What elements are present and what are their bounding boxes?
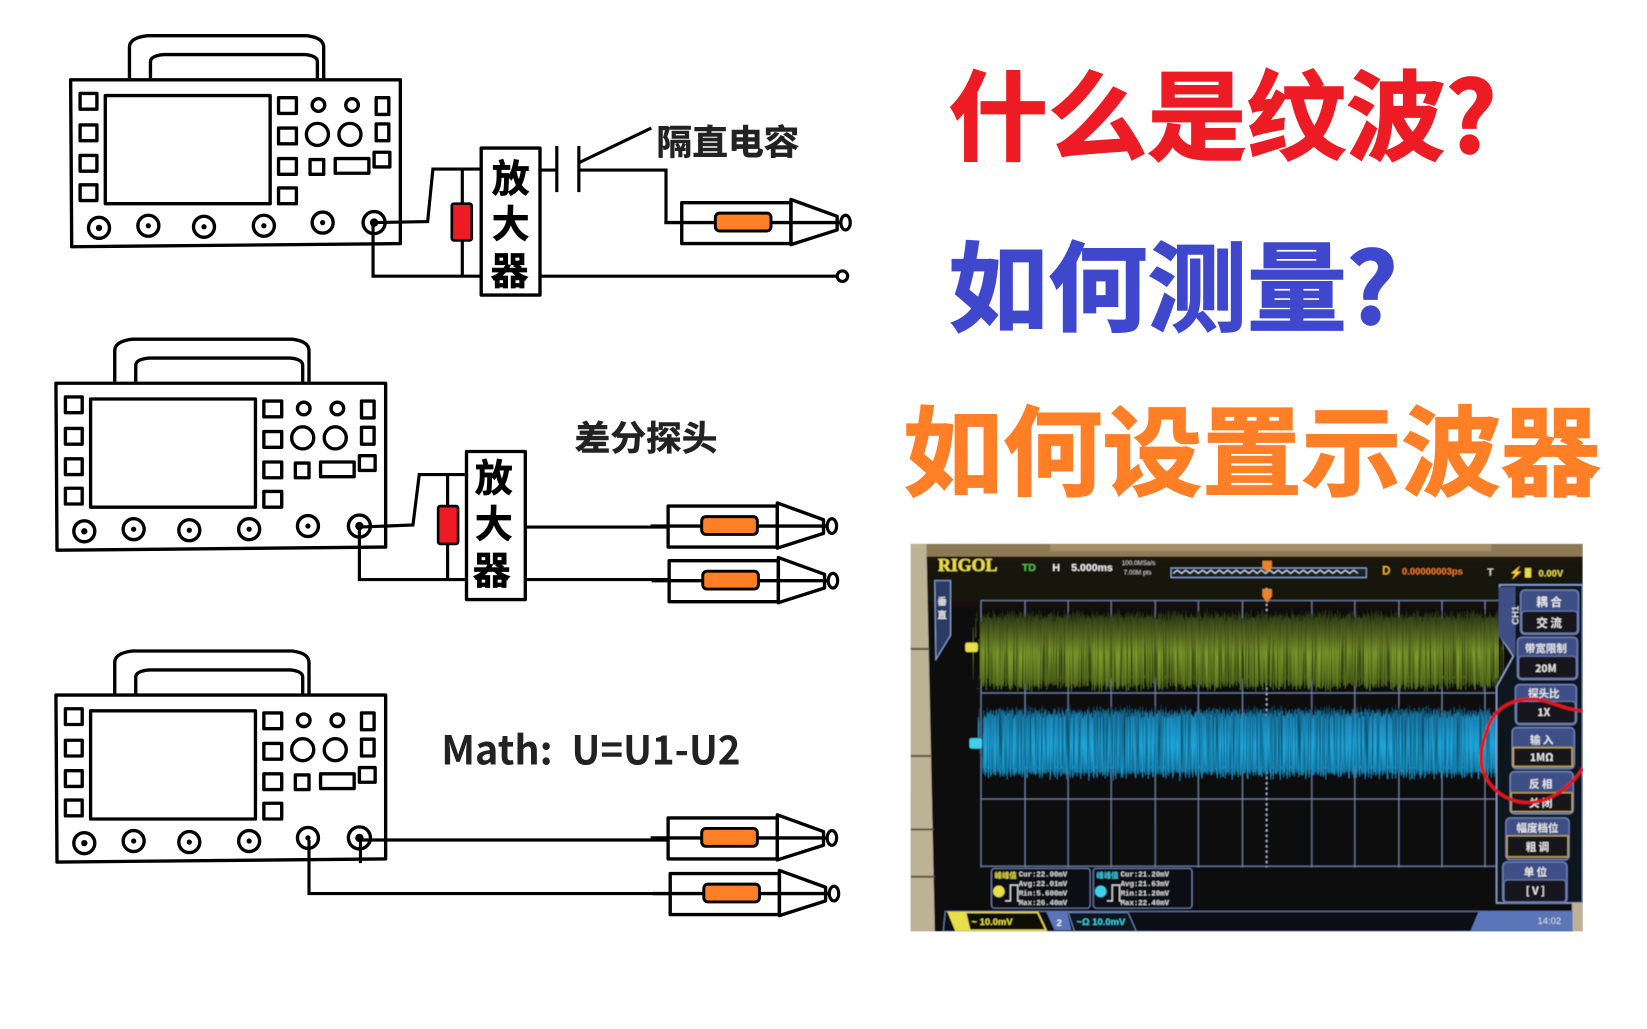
bottom channel bar: 14:02: [1538, 916, 1561, 927]
shunt resistor 2: [438, 506, 458, 544]
menu: coupling: 耦 合: [1536, 594, 1562, 610]
shunt resistor 1: [452, 204, 472, 240]
probe 1: [666, 200, 850, 245]
top status bar: ⚡: [1509, 565, 1524, 579]
vertical side tab: 垂: [937, 594, 947, 608]
oscilloscope diagram: blocking capacitor: [71, 36, 850, 296]
CH1 menu panel: CH1: [1511, 606, 1522, 625]
CH1 menu panel: [1497, 585, 1583, 903]
amplifier box 1: 器: [491, 241, 529, 296]
menu: bandwidth: 带宽限制: [1525, 641, 1567, 656]
menu: invert: [1510, 772, 1573, 814]
amplifier box 2: 放: [475, 447, 513, 502]
probe channel 1: [652, 815, 837, 860]
amplifier box 2: 大: [475, 494, 513, 549]
menu: probe ratio: 1X: [1537, 705, 1551, 720]
differential probe top: [652, 503, 837, 548]
top status bar: H: [1052, 562, 1060, 574]
amplifier box 1: 大: [492, 193, 530, 248]
peak-to-peak readout channel 1: Cur:22.00mV: [1019, 872, 1068, 880]
top status bar: 5.000ms: [1071, 562, 1113, 574]
peak-to-peak readout channel 1: Min:5.600mV: [1019, 891, 1068, 899]
menu: unit: [1503, 862, 1567, 903]
amplifier box 1: [481, 148, 540, 296]
probe channel 2: [654, 870, 839, 916]
menu: unit: 单 位: [1524, 865, 1548, 880]
heading: what is ripple: 什么是纹波?: [948, 40, 1497, 181]
probe wires 3: [309, 840, 670, 894]
top status bar: [938, 555, 1564, 603]
photo bezel: [911, 544, 1583, 931]
top status bar: RIGOL: [938, 555, 997, 575]
blocking capacitor: [540, 128, 666, 223]
channel markers: [965, 643, 982, 749]
label: blocking capacitor: 隔直电容: [657, 114, 799, 164]
oscilloscope 2: [56, 339, 386, 550]
green channel trace: [980, 615, 1499, 685]
top status bar: TD: [1022, 562, 1036, 574]
menu: amplitude scale: [1506, 818, 1569, 860]
wiring to amplifier 2: [359, 475, 468, 580]
measurement grid: [981, 588, 1500, 867]
bottom channel bar: 2: [1057, 918, 1062, 929]
oscilloscope 3: [56, 651, 386, 862]
menu: input impedance: 1MΩ: [1530, 750, 1553, 765]
menu: invert: 关 闭: [1529, 795, 1552, 810]
vertical side tab: [935, 581, 951, 659]
peak-to-peak readout channel 2: 峰峰值: [1096, 871, 1119, 880]
heading: how to set the oscilloscope: 如何设置示波器: [903, 376, 1601, 517]
top status bar: D: [1382, 565, 1390, 577]
menu: amplitude scale: 幅度档位: [1516, 821, 1559, 836]
wiring to amplifier 1: [373, 169, 481, 276]
peak-to-peak readout channel 2: [1093, 868, 1192, 908]
ground wire and clip: [540, 271, 848, 281]
amplifier box 2: 器: [473, 540, 511, 595]
peak-to-peak readout channel 2: Max:22.40mV: [1121, 900, 1170, 908]
oscilloscope diagram: differential probe: [56, 339, 838, 603]
top status bar: 7.00M pts: [1124, 569, 1151, 576]
menu: coupling: 交 流: [1536, 615, 1562, 631]
differential probe bottom: [653, 558, 838, 603]
right edge bezel: [1572, 903, 1583, 931]
photo: Rigol oscilloscope screen: [911, 544, 1583, 931]
bottom channel bar: ~ 10.0mV: [972, 917, 1013, 928]
oscilloscope 1: [71, 36, 400, 247]
probe wires 2: [525, 527, 669, 580]
blue channel trace: [983, 712, 1499, 773]
top status bar: 100.0MSa/s: [1122, 560, 1155, 567]
label: math formula: U=U1-U2: [572, 719, 741, 776]
peak-to-peak readout channel 1: Avg:22.01mV: [1019, 881, 1068, 889]
amplifier box 1: 放: [492, 148, 530, 203]
top status bar: 0.00V: [1539, 568, 1564, 579]
peak-to-peak readout channel 1: Max:26.40mV: [1019, 900, 1068, 908]
vertical side tab: 直: [937, 607, 947, 621]
bottom channel bar: ~Ω 10.0mV: [1077, 917, 1126, 928]
menu: invert: 反 相: [1529, 776, 1552, 791]
top status bar: T: [1487, 566, 1494, 578]
bottom channel bar: [943, 911, 1572, 931]
peak-to-peak readout channel 2: Min:21.20mV: [1121, 891, 1170, 899]
peak-to-peak readout channel 1: 峰峰值: [995, 871, 1017, 880]
menu: probe ratio: [1515, 685, 1576, 724]
red circle annotation: [1481, 699, 1583, 803]
menu: coupling: [1521, 590, 1578, 634]
top status bar: 0.00000003ps: [1402, 566, 1463, 577]
menu: bandwidth: 20M: [1535, 661, 1557, 676]
label: math formula: Math:: [441, 719, 553, 776]
menu: input impedance: [1512, 728, 1574, 769]
menu: amplitude scale: 粗 调: [1526, 839, 1549, 854]
menu: input impedance: 输 入: [1530, 732, 1554, 747]
menu: probe ratio: 探头比: [1528, 686, 1560, 701]
peak-to-peak readout channel 2: Avg:21.63mV: [1121, 881, 1170, 889]
peak-to-peak readout channel 1: [992, 868, 1090, 908]
label: differential probe: 差分探头: [575, 410, 717, 460]
heading: how to measure: 如何测量?: [948, 211, 1398, 352]
menu: unit: [ V ]: [1526, 884, 1545, 899]
amplifier box 2: [466, 447, 525, 600]
peak-to-peak readout channel 2: Cur:21.20mV: [1121, 872, 1170, 880]
menu: bandwidth: [1518, 637, 1577, 679]
oscilloscope diagram: math subtraction: [56, 651, 839, 916]
